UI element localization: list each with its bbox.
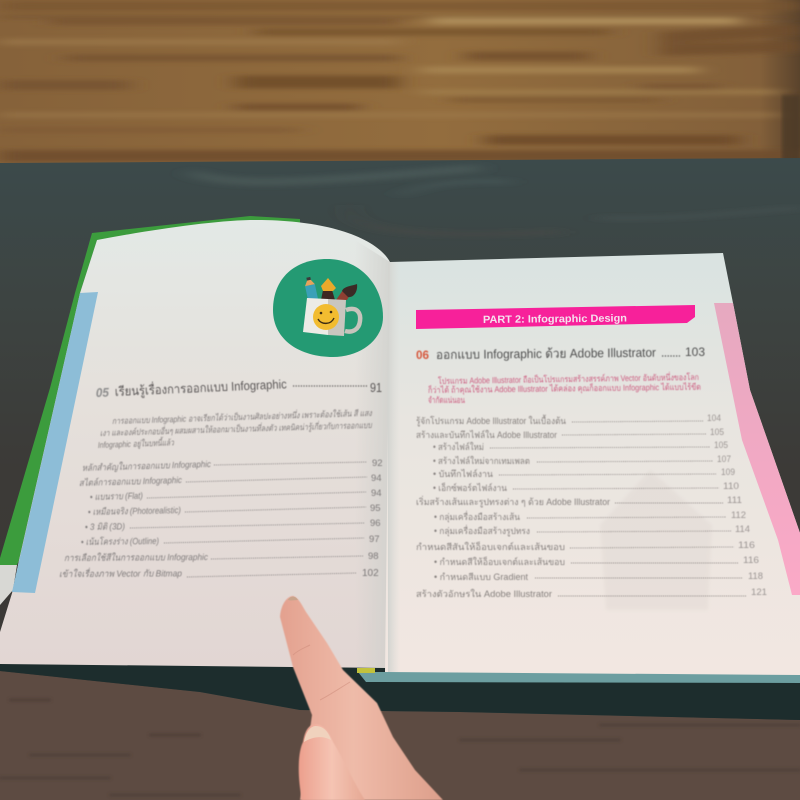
chapter 06 list: สร้างและบันทึกไฟล์ใน Adobe Illustrator — [416, 429, 557, 440]
yellow page tab at spine — [357, 668, 375, 673]
icon: mug handle — [345, 309, 360, 332]
under-sheet at page corner — [0, 565, 17, 605]
text group: left page contents — [59, 375, 383, 579]
book shadow band under pages — [0, 660, 800, 720]
chapter 06 intro paragraph: จำกัดแน่นอน — [428, 395, 465, 405]
chapter 06 intro paragraph: โปรแกรม Adobe Illustrator ถือเป็นโปรแกรมสร้างสรรค์ภาพ Vector อันดับหนึ่งของโลก — [438, 371, 699, 386]
chapter 05 page numbers: 97 — [369, 534, 380, 545]
chapter 06 list: • บันทึกไฟล์งาน — [433, 468, 493, 479]
background: lower wood table — [0, 671, 800, 800]
chapter 06 page numbers: 105 — [714, 440, 728, 450]
chapter 05 page numbers — [362, 458, 383, 579]
icon: mug body — [303, 298, 346, 336]
chapter 05 intro paragraph: เงา และองค์ประกอบอื่นๆ ผสมผสานให้ออกมาเป็นงานที่ลงตัว เทคนิคน่ารู้เกี่ยวกับการออกแบบ — [100, 419, 372, 439]
chapter 06 list: • กำหนดสีแบบ Gradient — [434, 572, 528, 582]
chapter 06 dot leaders — [490, 421, 747, 596]
icon: smiley — [313, 304, 339, 330]
background: upper wood wall — [0, 0, 800, 163]
chapter 06 list: รู้จักโปรแกรม Adobe Illustrator ในเบื้องต้น — [416, 414, 566, 427]
chapter 06 list: • สร้างไฟล์ใหม่จากเทมเพลต — [433, 455, 530, 466]
chapter 06 page numbers: 111 — [727, 495, 742, 505]
chapter 06 page numbers: 116 — [738, 540, 755, 550]
chapter 06 intro paragraph — [428, 371, 701, 405]
chapter 06 page numbers: 105 — [710, 427, 724, 437]
hand: thumb — [299, 724, 365, 800]
icon: pen nib — [321, 278, 336, 300]
chapter 06 page numbers: 104 — [707, 413, 721, 423]
chapter 05 intro paragraph: การออกแบบ Infographic อาจเรียกได้ว่าเป็นงานศิลปะอย่างหนึ่ง เพราะต้องใช้เส้น สี แสง — [112, 407, 373, 426]
chapter 06 list: • กลุ่มเครื่องมือสร้างรูปทรง — [434, 524, 530, 537]
chapter 05 heading: เรียนรู้เรื่องการออกแบบ Infographic — [114, 375, 287, 400]
chapter 05 page numbers: 98 — [368, 551, 379, 562]
chapter 05 list: • เน้นโครงร่าง (Outline) — [81, 535, 159, 547]
chapter 05 list: หลักสำคัญในการออกแบบ Infographic — [82, 458, 211, 474]
chapter 06 page numbers: 112 — [731, 510, 746, 520]
chapter 05 page numbers: 94 — [371, 473, 382, 484]
chapter 05 list: สไตล์การออกแบบ Infographic — [79, 474, 182, 488]
chapter 06 intro paragraph: ก็ว่าได้ ถ้าคุณใช้งาน Adobe Illustrator ได้คล่อง คุณก็ออกแบบ Infographic ได้แบบไร้ขีด — [428, 381, 701, 396]
right page sheet — [385, 253, 800, 675]
spine shading: left page — [355, 240, 390, 668]
chapter 05 list: • แบนราบ (Flat) — [90, 491, 143, 502]
chapter 05 intro paragraph: Infographic อยู่ในบทนี้แล้ว — [98, 436, 175, 451]
panel: left page — [0, 216, 390, 668]
chapter 05 heading: 91 — [370, 381, 382, 395]
chapter 06 page numbers: 109 — [721, 467, 735, 477]
chapter 06 list: สร้างตัวอักษรใน Adobe Illustrator — [416, 589, 552, 599]
chapter 06 list: เริ่มสร้างเส้นและรูปทรงต่าง ๆ ด้วย Adobe Illustrator — [416, 495, 610, 508]
chapter 05 heading — [96, 375, 382, 400]
chapter 05 page numbers: 95 — [370, 503, 381, 514]
chapter 06 list: กำหนดสีสันให้อ็อบเจกต์และเส้นขอบ — [416, 540, 565, 552]
chapter 06 heading: 103 — [685, 347, 705, 359]
chapter 06 page numbers: 121 — [751, 587, 767, 597]
chapter 06 list: • กลุ่มเครื่องมือสร้างเส้น — [434, 510, 520, 523]
chapter 05 page numbers: 96 — [370, 518, 381, 529]
chapter 06 list — [416, 414, 610, 599]
chapter 06 page numbers — [707, 413, 767, 597]
fingernail tip — [288, 597, 298, 600]
chapter 06 page numbers: 114 — [735, 524, 750, 534]
left page sheet — [0, 220, 390, 668]
chapter 05 list: เข้าใจเรื่องภาพ Vector กับ Bitmap — [59, 566, 182, 579]
chapter 05 intro paragraph — [98, 407, 373, 451]
chapter 06 list: • สร้างไฟล์ใหม่ — [433, 441, 484, 452]
chapter 06 page numbers: 107 — [717, 454, 731, 464]
chapter 05 page numbers: 94 — [371, 488, 382, 499]
icon: brush — [336, 284, 357, 300]
chapter 05 page numbers: 102 — [362, 568, 379, 579]
hand: index finger — [280, 596, 443, 800]
panel: right page — [385, 253, 800, 675]
chapter 06 page numbers: 118 — [748, 571, 763, 581]
text group: right page contents — [416, 346, 767, 599]
knuckle crease — [293, 645, 350, 700]
faint watermark illustration — [600, 470, 712, 610]
chapter 05 heading: 05 — [96, 386, 110, 400]
chapter 06 page numbers: 110 — [723, 481, 739, 491]
spine shading: right page — [388, 262, 400, 672]
chapter 05 dot leaders — [130, 462, 367, 577]
chapter 05 list — [59, 458, 211, 579]
chapter 05 page numbers: 92 — [372, 458, 383, 469]
chapter 06 list: • กำหนดสีให้อ็อบเจกต์และเส้นขอบ — [434, 555, 565, 567]
left cover edge: green — [0, 216, 300, 565]
chapter 06 heading: ออกแบบ Infographic ด้วย Adobe Illustrator — [436, 346, 656, 362]
thumbnail — [304, 726, 331, 742]
pink side strip — [714, 303, 800, 595]
background: dark table — [0, 158, 800, 725]
icon: pencil — [303, 276, 318, 302]
chapter 06 list: • เอ็กซ์พอร์ตไฟล์งาน — [433, 481, 507, 493]
book cover edge: teal — [358, 672, 800, 683]
chapter 05 list: • 3 มิติ (3D) — [85, 521, 125, 532]
chapter 05 list: การเลือกใช้สีในการออกแบบ Infographic — [64, 551, 208, 563]
chapter 06 heading: 06 — [416, 348, 429, 362]
banner: PART 2: PART 2: Infographic Design — [483, 312, 627, 326]
blue side strip — [12, 292, 98, 593]
banner: PART 2 — [416, 305, 695, 329]
chapter 05 list: • เหมือนจริง (Photorealistic) — [88, 505, 181, 517]
icon: mug with art tools in green circle — [273, 259, 383, 357]
chapter 06 page numbers: 116 — [743, 555, 759, 565]
